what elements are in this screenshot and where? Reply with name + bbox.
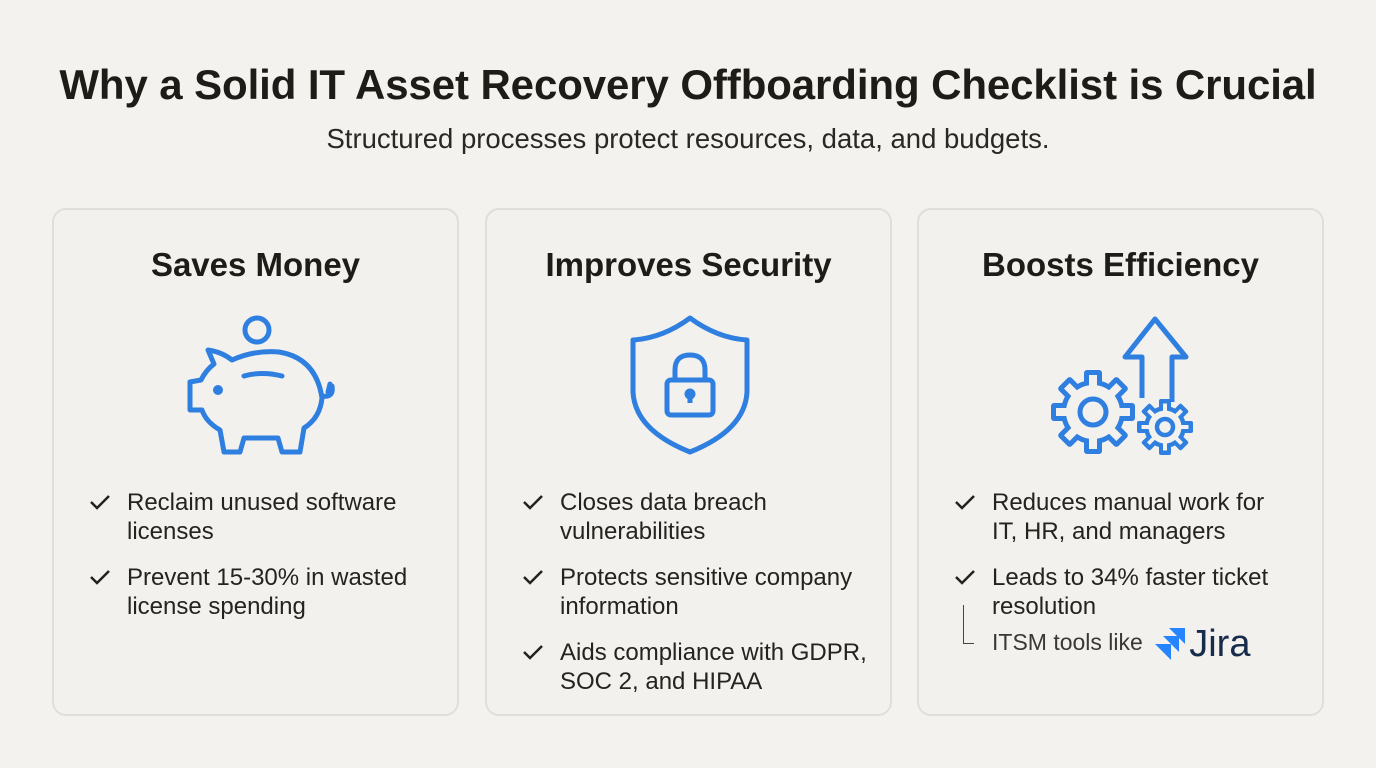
item: Reduces manual work for IT, HR, and managers: [992, 489, 1264, 545]
item: Reclaim unused software licenses: [127, 489, 396, 545]
subtitle: Structured processes protect resources, data, and budgets.: [326, 123, 1050, 154]
heading: saves money: Saves Money: [151, 246, 360, 283]
checklist: improves security: [523, 489, 867, 695]
panel: improves security: [485, 208, 892, 716]
item: Closes data breach vulnerabilities: [560, 489, 767, 545]
jira note: [963, 605, 1250, 665]
icon: gears with arrow: [1051, 316, 1193, 455]
panel: boosts efficiency: [917, 208, 1324, 716]
title: Why a Solid IT Asset Recovery Offboarding Checklist is Crucial: [59, 61, 1317, 108]
icon: piggy bank: [188, 316, 335, 454]
item: Protects sensitive company information: [560, 564, 852, 620]
jira note: ITSM tools like Jira: [992, 623, 1250, 665]
panel: saves money: [52, 208, 459, 716]
checklist: boosts efficiency: [955, 489, 1268, 665]
item: Aids compliance with GDPR, SOC 2, and HIPAA: [560, 639, 867, 695]
icon: shield lock: [630, 316, 750, 454]
heading: improves security: Improves Security: [545, 246, 832, 283]
checklist: saves money: [90, 489, 407, 620]
item: Leads to 34% faster ticket resolution: [992, 564, 1268, 620]
item: Prevent 15-30% in wasted license spending: [127, 564, 407, 620]
heading: boosts efficiency: Boosts Efficiency: [982, 246, 1259, 283]
